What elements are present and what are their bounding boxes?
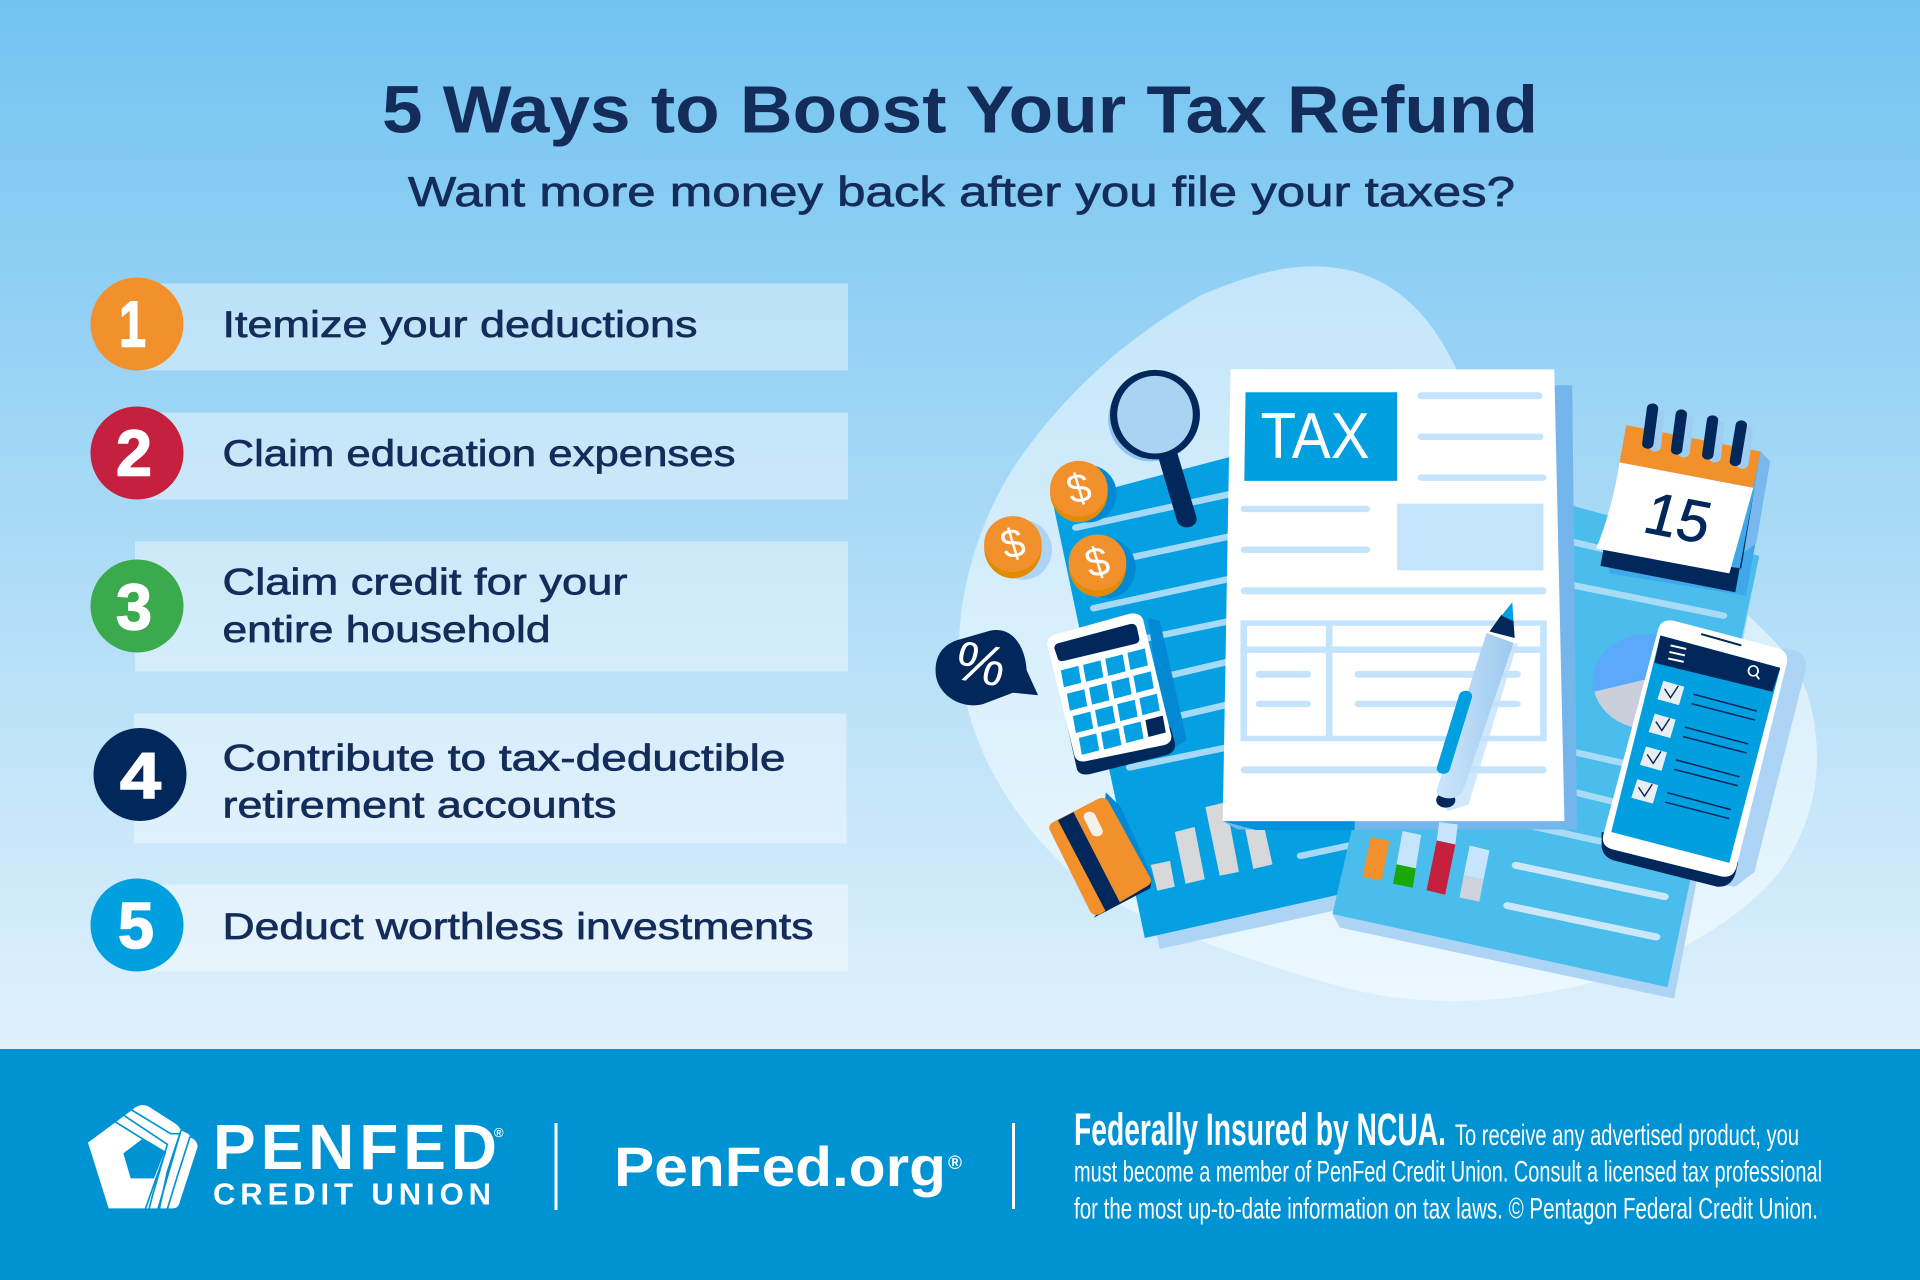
main tax document [1223,369,1564,821]
icon: calendar [1596,408,1770,596]
icon: coin 2 [984,516,1052,580]
list item 3: Claim credit for your [222,560,628,602]
footer band [0,1049,1920,1280]
list item 2: 2 [116,416,152,490]
divider [554,1123,558,1210]
bar chart on right paper [1362,822,1490,902]
icon: pen [1436,602,1518,811]
list item 4 [94,714,846,844]
icon: coin 3 [1069,535,1136,598]
list item 4: retirement accounts [222,784,616,826]
list item 5: Deduct worthless investments [222,905,814,947]
list item 1: Itemize your deductions [222,303,698,345]
list item 1: 1 [119,288,146,360]
icon: calculator [1047,613,1187,775]
list item 3: entire household [222,608,550,650]
tax illustration [936,266,1817,1001]
icon: coin 1 [1050,461,1117,523]
list item 3: 3 [116,570,152,644]
disclaimer text [1074,1104,1822,1226]
website address: PenFed.org [614,1135,946,1198]
icon: credit card [1049,792,1154,918]
website registered mark: ® [948,1153,962,1174]
icon: percent speech bubble: % [948,630,1013,699]
disclaimer text: Federally Insured by NCUA. [1074,1104,1446,1155]
list item 5: 5 [118,889,154,962]
icon: coin 3: $ [1080,537,1115,586]
left back paper [1053,456,1519,949]
icon: coin 2: $ [995,519,1031,568]
list item 4: 4 [120,739,161,812]
icon: smartphone with checklist [1602,620,1806,887]
list item 1 [90,278,848,370]
logo: PenFed pentagon mark [88,1105,198,1209]
title: 5 Ways to Boost Your Tax Refund [382,72,1538,148]
list item 4: Contribute to tax-deductible [222,736,786,778]
icon: calendar: 15 [1638,480,1719,556]
subtitle: Want more money back after you file your taxes? [408,168,1515,215]
right back paper [1332,501,1759,999]
list item 5 [90,878,848,972]
logo wordmark: PENFED: PENFED [213,1111,497,1183]
logo wordmark: credit union: CREDIT UNION [213,1176,491,1212]
icon: coin 1: $ [1061,464,1096,513]
list item 3 [90,542,848,672]
list item 2: Claim education expenses [222,432,736,474]
main tax document: TAX [1261,400,1370,472]
list item 2 [90,406,848,500]
icon: percent speech bubble [936,630,1038,705]
background blob [959,266,1817,1001]
divider [1012,1123,1015,1209]
document shadow [1223,385,1577,830]
registered mark: ® [494,1125,504,1140]
icon: magnifying glass [1108,373,1196,519]
